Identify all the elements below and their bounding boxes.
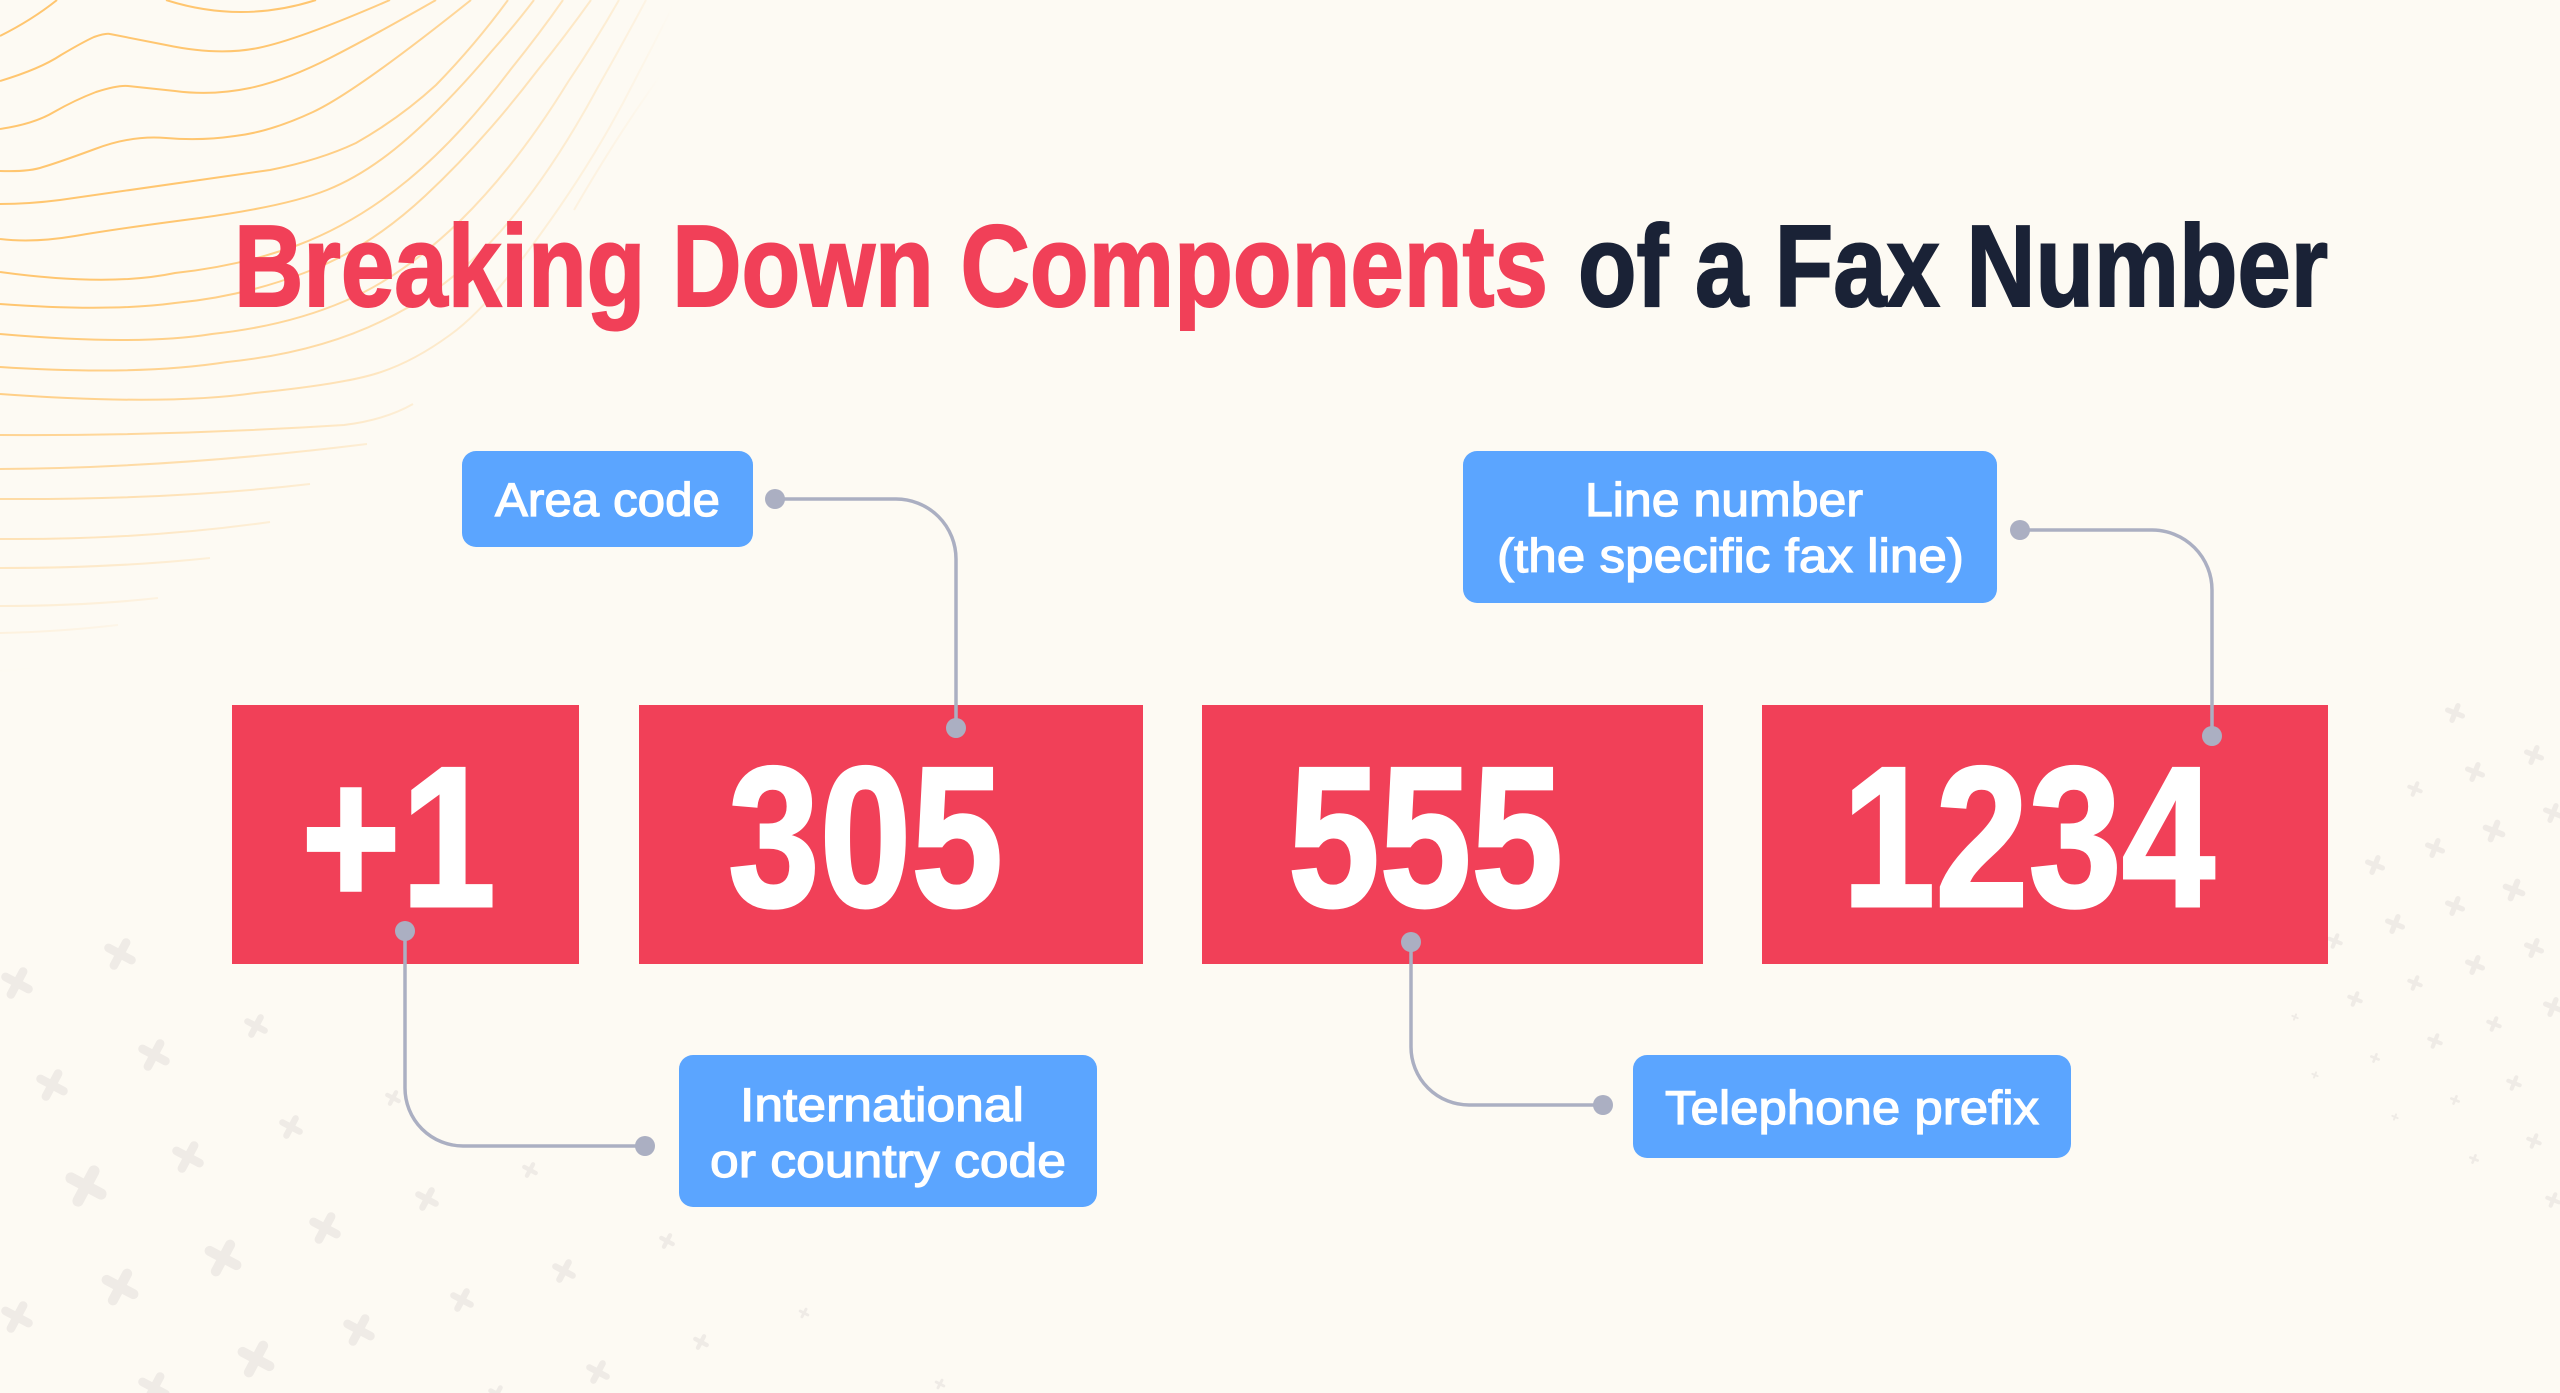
label: Line number: (the specific fax line): [1497, 529, 1964, 582]
label: International or country code: or country code: [710, 1134, 1066, 1187]
title: Breaking Down Components: [234, 201, 1548, 331]
connector: +1 to International: [395, 921, 655, 1156]
title: of a Fax Number: [1578, 201, 2328, 331]
label: Line number: [1463, 451, 1997, 603]
label: Telephone prefix: Telephone prefix: [1665, 1081, 2039, 1134]
connector: Area code to 305: [765, 489, 966, 738]
number box: 555: 555: [1288, 726, 1563, 949]
label: International or country code: International: [740, 1078, 1024, 1131]
label: International or country code: [679, 1055, 1097, 1207]
decorative contour lines: [0, 0, 649, 634]
number box: 555: [1202, 705, 1703, 964]
number box: +1: +1: [301, 726, 496, 949]
label: Line number: Line number: [1585, 473, 1863, 526]
number box: 1234: 1234: [1842, 726, 2215, 949]
number box: 305: [639, 705, 1143, 964]
label: Telephone prefix: [1633, 1055, 2071, 1158]
label: Area code: Area code: [495, 473, 720, 526]
connector: 555 to Telephone prefix: [1401, 932, 1613, 1115]
number box: 305: 305: [728, 726, 1003, 949]
number box: +1: [232, 705, 579, 964]
decorative crosses: left: [0, 936, 946, 1393]
number box: 1234: [1762, 705, 2328, 964]
decorative crosses: right: [2291, 703, 2560, 1208]
connector: Line number to 1234: [2010, 520, 2222, 746]
label: Area code: [462, 451, 753, 547]
